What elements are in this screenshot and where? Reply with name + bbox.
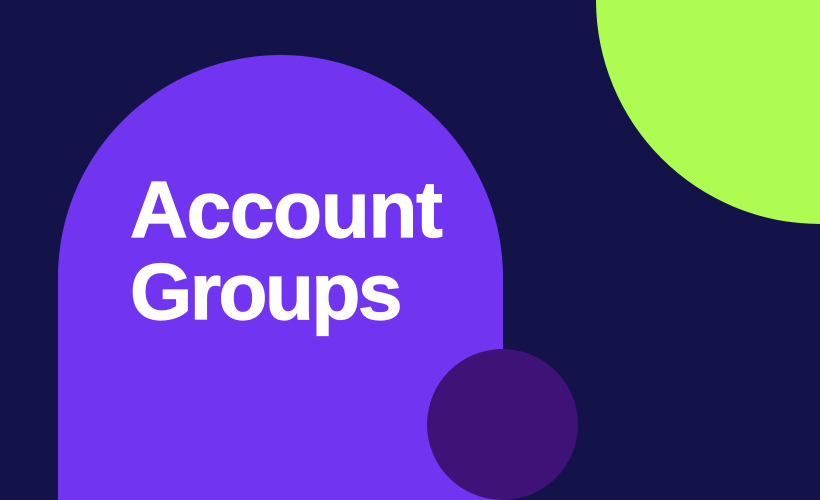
dark purple circle: [427, 349, 578, 500]
lime circle: [596, 0, 820, 224]
title: Groups: [130, 247, 400, 336]
title: [130, 165, 442, 336]
title: Account: [130, 165, 442, 254]
purple arch panel: [58, 55, 503, 500]
